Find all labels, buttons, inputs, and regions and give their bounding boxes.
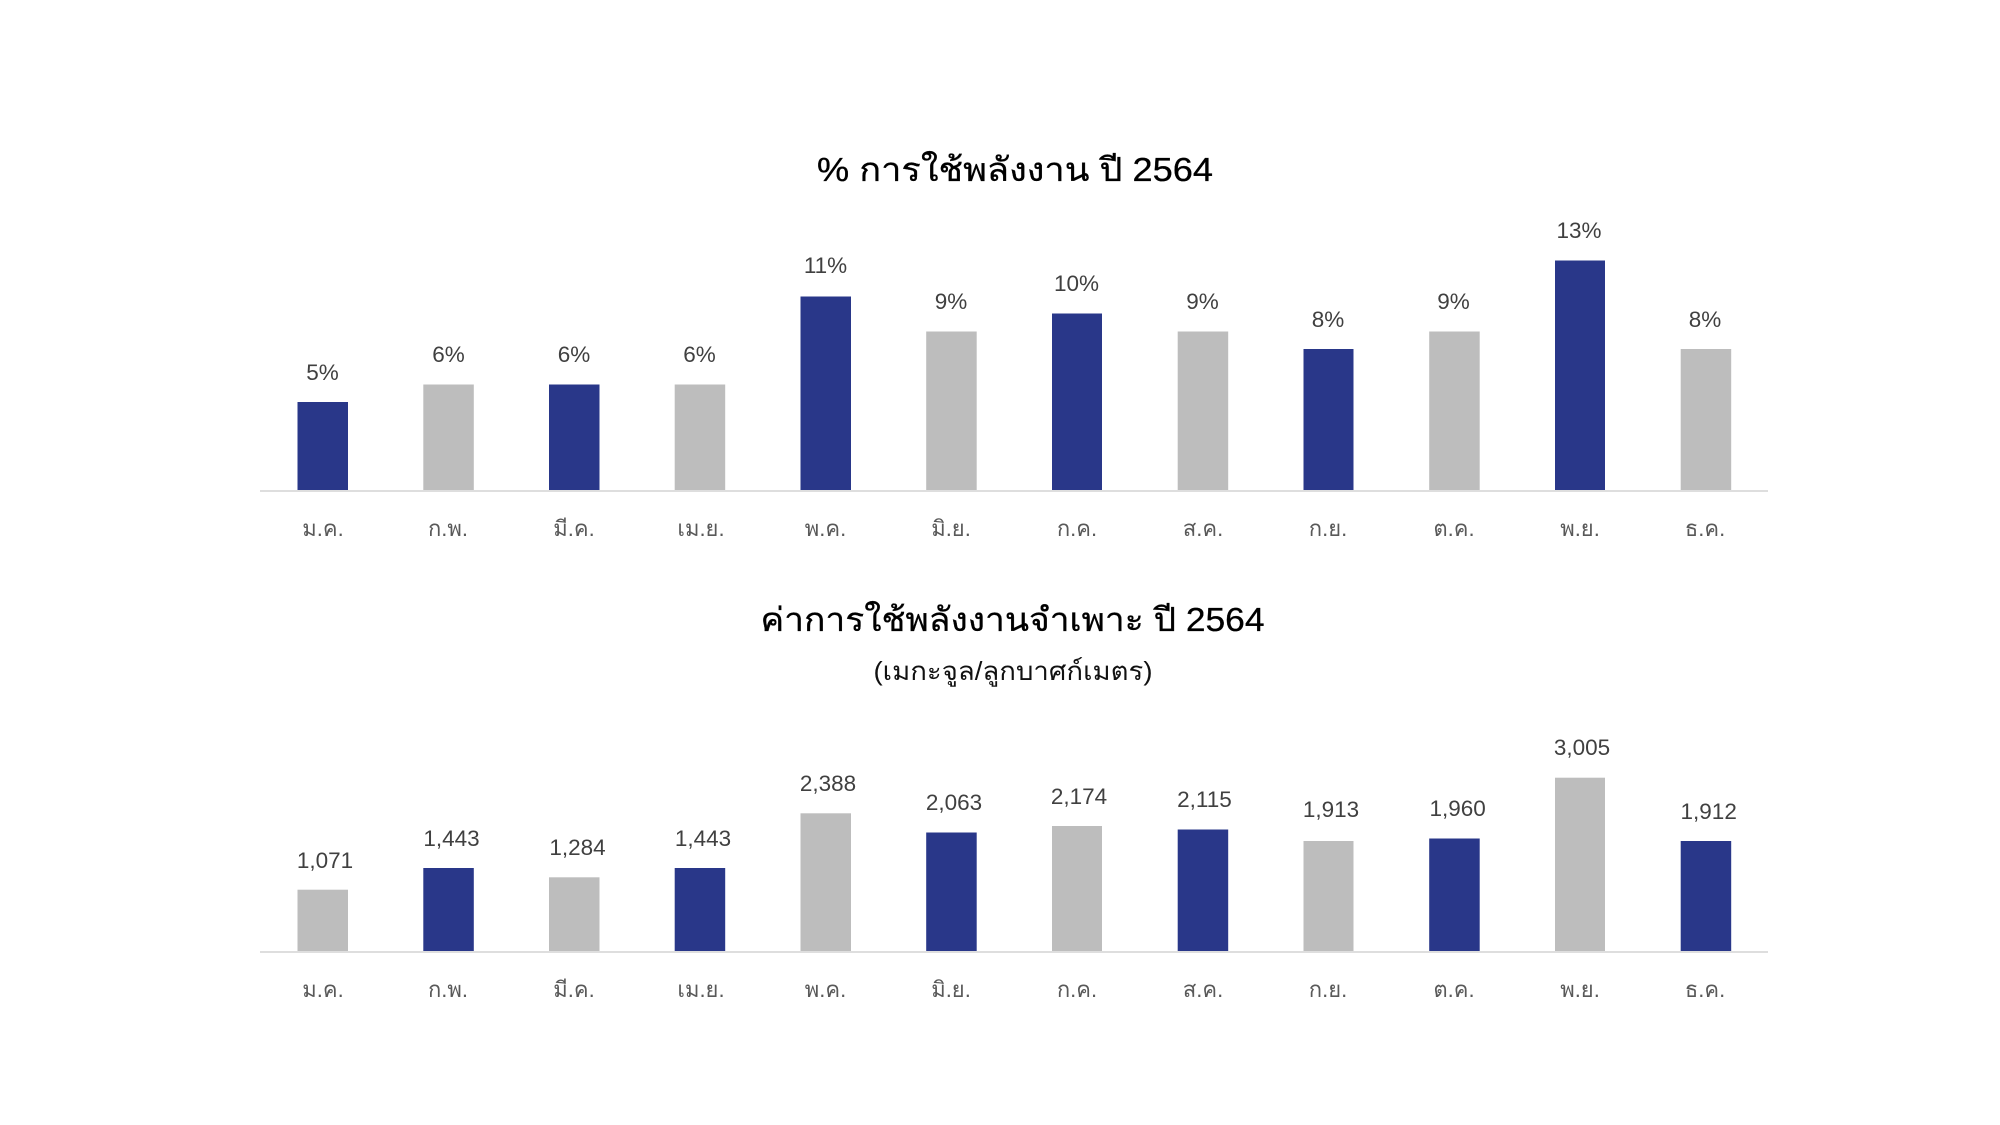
axis line [260,490,1768,492]
value labels [297,735,1737,873]
month labels: ก.ย. [1309,516,1347,541]
value labels: 1,284 [549,835,606,860]
month labels: พ.ค. [805,516,846,541]
value labels: 2,174 [1051,784,1107,809]
month labels: ก.ย. [1309,977,1347,1002]
month labels: พ.ย. [1560,977,1600,1002]
month labels: ต.ค. [1433,977,1475,1002]
value labels: 5% [306,360,339,385]
month labels: ต.ค. [1433,516,1475,541]
value labels: 1,071 [297,848,353,873]
month labels: เม.ย. [677,516,725,541]
value labels: 2,115 [1177,787,1232,812]
month labels: ธ.ค. [1685,977,1725,1002]
bars [298,260,1731,490]
month labels: ก.ค. [1057,516,1097,541]
month labels: มี.ค. [553,516,595,541]
month labels: ม.ค. [302,516,344,541]
chart: percent energy use by month [260,218,1768,541]
month labels: ก.ค. [1057,977,1097,1002]
subtitle: unit: (เมกะจูล/ลูกบาศก์เมตร) [874,656,1152,687]
value labels: 10% [1054,271,1099,296]
value labels: 11% [804,253,847,278]
month labels: ก.พ. [428,977,468,1002]
value labels: 1,913 [1303,797,1359,822]
value labels: 9% [935,289,967,314]
value labels: 1,912 [1681,799,1737,824]
value labels: 2,388 [800,771,856,796]
title: specific energy use 2564: ค่าการใช้พลังงานจำเพาะ ปี 2564 [760,601,1264,638]
value labels: 13% [1556,218,1602,243]
month labels: มิ.ย. [931,977,971,1002]
value labels: 9% [1437,289,1470,314]
month labels: มี.ค. [553,977,595,1002]
month labels: เม.ย. [677,977,725,1002]
value labels: 8% [1312,307,1344,332]
chart: specific energy use by month [260,735,1768,1002]
month labels [302,977,1725,1002]
value labels: 6% [432,342,465,367]
value labels: 9% [1186,289,1219,314]
month labels: ม.ค. [302,977,344,1002]
month labels: มิ.ย. [931,516,971,541]
bars [298,778,1731,951]
value labels: 1,443 [423,826,480,851]
month labels [302,516,1725,541]
month labels: ส.ค. [1183,516,1223,541]
value labels [306,218,1721,385]
value labels: 6% [558,342,590,367]
value labels: 3,005 [1554,735,1610,760]
value labels: 1,443 [675,826,731,851]
month labels: ส.ค. [1183,977,1223,1002]
value labels: 1,960 [1429,796,1486,821]
month labels: พ.ย. [1560,516,1600,541]
month labels: ก.พ. [428,516,468,541]
month labels: ธ.ค. [1685,516,1725,541]
value labels: 8% [1689,307,1721,332]
value labels: 6% [683,342,716,367]
title: percent energy use 2564: % การใช้พลังงาน ปี 2564 [817,151,1213,188]
axis line [260,951,1768,953]
value labels: 2,063 [926,790,982,815]
month labels: พ.ค. [805,977,846,1002]
